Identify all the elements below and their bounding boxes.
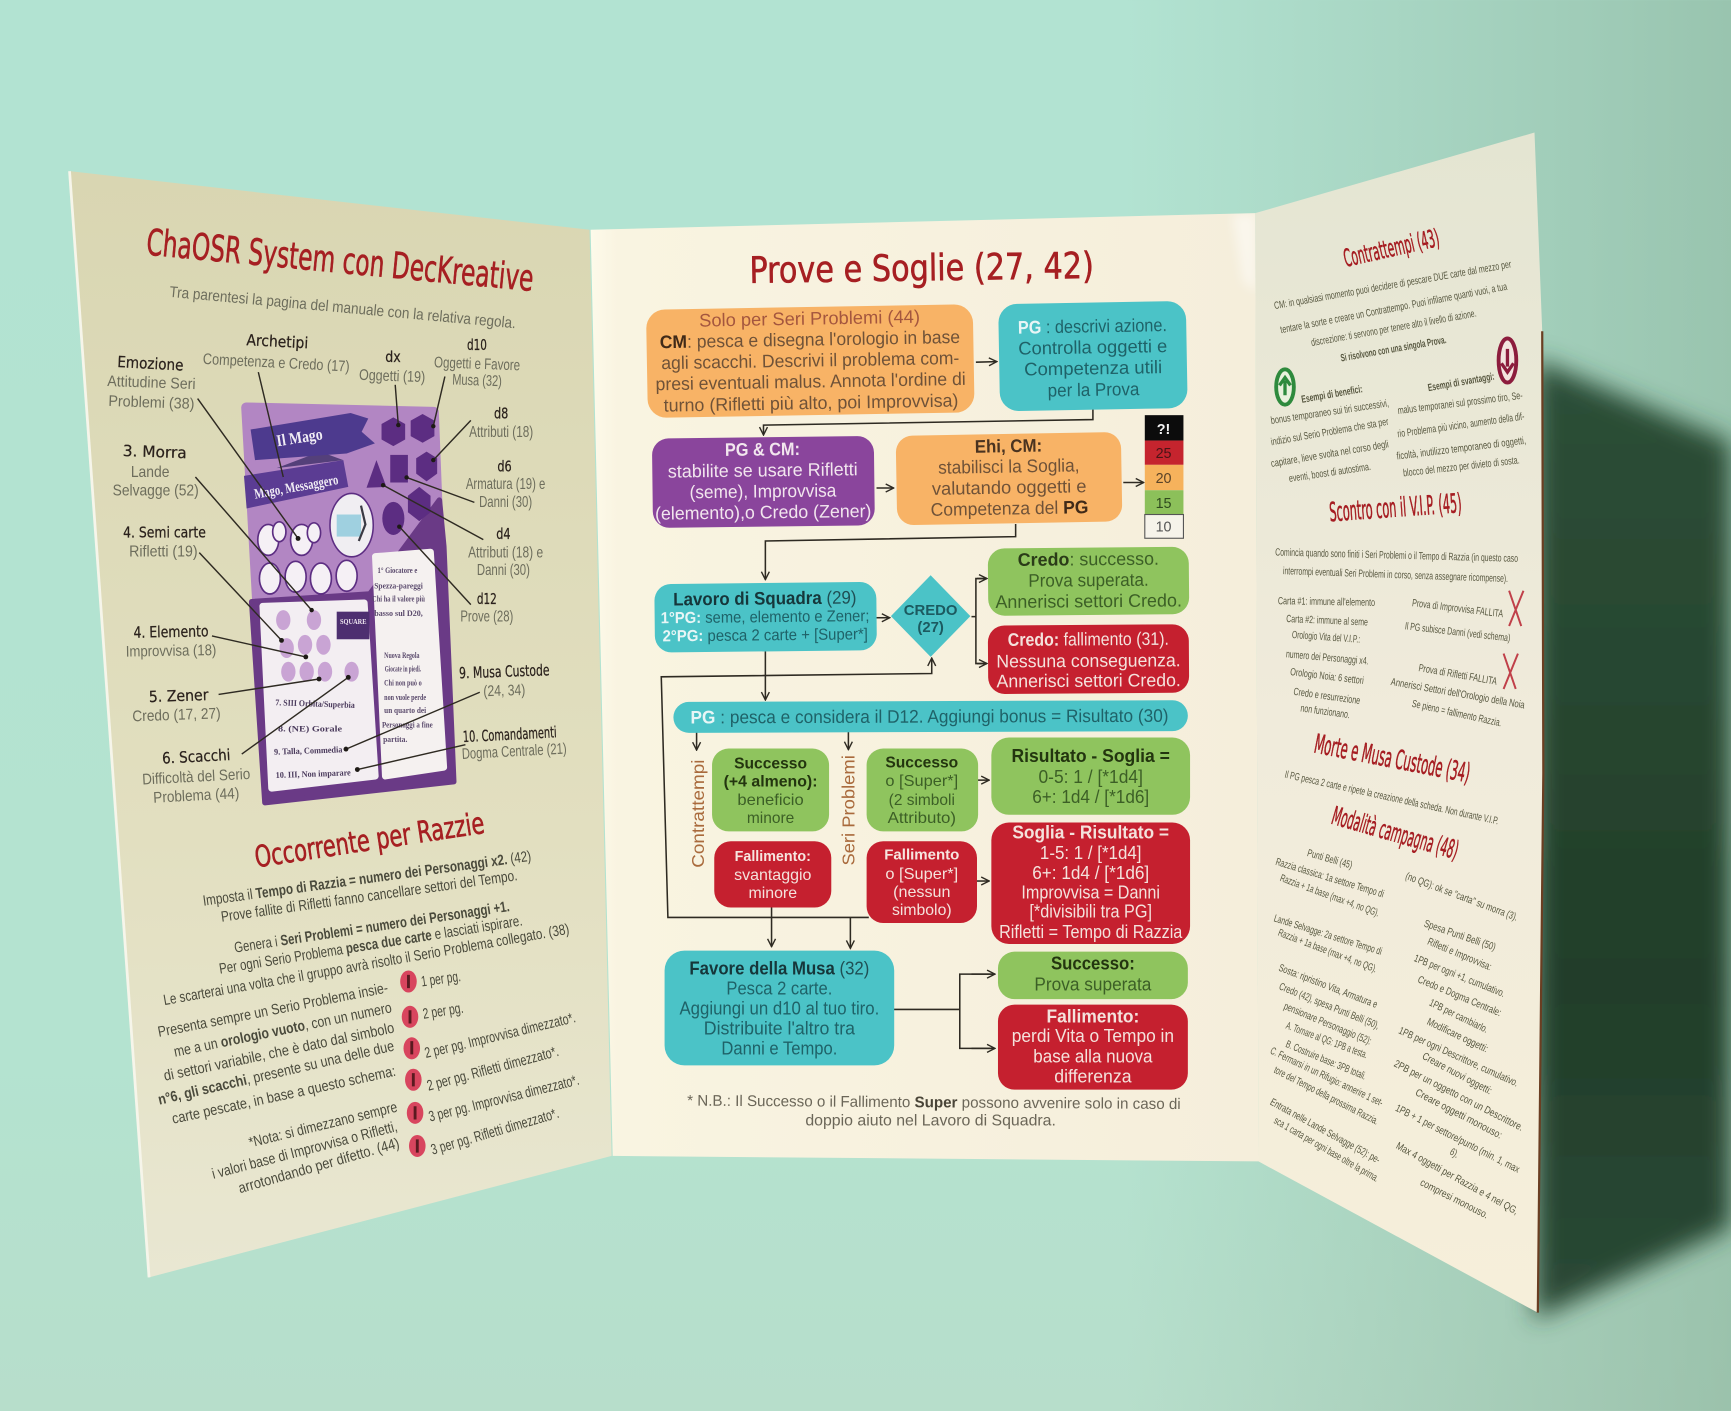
chart: threshold scale [1145, 415, 1183, 538]
box: Solo per Seri Problemi: CM: pesca e disegna l'orologio in base [660, 327, 960, 352]
callout: Archetipi [202, 331, 350, 376]
box: Favore della Musa [665, 951, 894, 1065]
text block: carte VIP: numero dei Personaggi x4. [1285, 649, 1369, 667]
text block: prove fallite: Prova di Improvvisa FALLITA [1411, 598, 1504, 620]
card right white area [375, 552, 444, 776]
callout: d6: Danni (30) [479, 494, 532, 511]
callout: 3. Morra [113, 442, 199, 500]
text block: orologio [157, 980, 397, 1128]
box: Favore della Musa: Aggiungi un d10 al tuo tiro. [679, 999, 879, 1019]
text block: campagna right column: Creare nuovi oggetti: [1420, 1051, 1493, 1097]
text block: nota: arrotondando per difetto. (44) [237, 1136, 401, 1197]
box: Successo +4 almeno: Successo [734, 755, 807, 772]
box: Risultato - Soglia: Risultato - Soglia = [1011, 746, 1170, 766]
box: Successo o Super: Successo [885, 754, 958, 771]
card left text: 7. SIII Orbita/Superbia [275, 697, 355, 710]
text block: contrattempi intro: CM: in qualsiasi momento puoi decidere di pescare DUE carte dal mezzo per [1273, 259, 1513, 312]
text block: campagna left column: Lande Selvagge: 2a settore Tempo di [1272, 913, 1383, 958]
box: Successo prova superata: Prova superata [1034, 974, 1152, 994]
square tag [337, 612, 369, 639]
card left text: 10. III, Non imparare [276, 767, 351, 780]
callout: Archetipi: Archetipi [246, 331, 309, 352]
panel: right page: Modalità campagna (48) [1329, 800, 1462, 865]
text block: scontro intro: Comincia quando sono finiti i Seri Problemi o il Tempo di Razzia (in questo caso [1275, 547, 1518, 565]
text block: svantaggi [1396, 372, 1527, 479]
box: Ehi, CM: Competenza del PG [930, 497, 1089, 520]
callout: 3. Morra: Lande [131, 464, 169, 481]
box: Lavoro di Squadra [654, 582, 877, 653]
text block: campagna left column: Entrata nelle Lande Selvagge (52): pe- [1268, 1097, 1382, 1166]
box: Risultato - Soglia: 6+: 1d4 / [*1d6] [1032, 787, 1149, 807]
callout: 10. Comandamenti: Dogma Centrale (21) [461, 741, 567, 763]
callout: 4. Elemento: 4. Elemento [133, 622, 209, 642]
subtitle: Tra parentesi la pagina del manuale con la relativa regola. [169, 284, 517, 332]
banner: Il Mago [251, 413, 375, 468]
text block: contrattempi intro [1273, 259, 1513, 364]
footnote: doppio aiuto nel Lavoro di Squadra. [805, 1113, 1056, 1130]
box: Credo successo: Prova superata. [1028, 570, 1149, 591]
square tag: SQUARE [340, 617, 367, 626]
chart: threshold scale: 20 [1156, 471, 1172, 487]
box: Lavoro di Squadra: Lavoro di Squadra (29) [673, 588, 857, 609]
text block: Tempo e Seri Problemi: Per ogni Serio Problema pesca due carte e lasciati ispirare. [218, 913, 524, 978]
text block: carte VIP: Credo e resurrezione [1293, 687, 1361, 707]
box: PG descrivi azione: PG : descrivi azione. [1018, 315, 1167, 338]
callout: Emozione: Problemi (38) [108, 393, 195, 413]
callout: Emozione [107, 353, 196, 413]
text block: campagna right column: compresi monouso. [1418, 1178, 1490, 1221]
callout: 5. Zener: 5. Zener [149, 686, 209, 706]
text block: contrattempi intro: Si risolvono con una singola Prova. [1340, 335, 1447, 364]
box: PG descrivi azione: Controlla oggetti e [1018, 336, 1167, 359]
text block: carte VIP: Carta #2: immune al seme [1286, 614, 1368, 629]
callout: 4. Semi carte: 4. Semi carte [123, 524, 206, 542]
text block: campagna left column: pensionare Personaggio (52): [1282, 1001, 1373, 1048]
text block: orologio: Presenta sempre un Serio Problema insie- [157, 980, 389, 1041]
text block: benefici: eventi, boost di autostima. [1288, 462, 1372, 485]
box: Fallimento perdi Vita: differenza [1054, 1067, 1132, 1087]
box: PG & CM: (seme), Improvvisa [689, 480, 837, 502]
box: Successo +4 almeno: minore [747, 810, 794, 827]
callout: d6: Armatura (19) e [466, 476, 545, 493]
icons: red clock badges [400, 970, 426, 1157]
text block: Tempo e Seri Problemi: Le scarterai una volta che il gruppo avrà risolto il Serio Problema collegato. (38) [162, 922, 571, 1009]
text block: svantaggi: blocco del mezzo per divieto di sosta. [1403, 455, 1520, 479]
box: Ehi, CM [896, 432, 1122, 525]
diagram: character card [244, 407, 454, 803]
callout: 10. Comandamenti [461, 723, 567, 763]
callout: 9. Musa Custode: 9. Musa Custode [459, 661, 550, 682]
callout: d10: d10 [467, 336, 487, 354]
text block: prove fallite: Il PG subisce Danni (vedi schema) [1404, 621, 1511, 644]
chart: threshold scale: 15 [1156, 496, 1172, 512]
panel: right page [1255, 133, 1543, 1313]
text block: campagna right column [1392, 871, 1525, 1221]
callout: 4. Semi carte: Rifletti (19) [129, 543, 198, 560]
card left text: 9. Talla, Commedia [274, 744, 343, 757]
box: Credo fallimento: Nessuna conseguenza. [996, 650, 1181, 672]
text block: scontro intro: interrompi eventuali Seri Problemi in corso, senza assegnare ricompense). [1283, 566, 1508, 585]
box: Favore della Musa: Favore della Musa (32) [689, 958, 869, 978]
text block: campagna left column: sca 1 carta per ogni base oltre la prima. [1272, 1116, 1380, 1185]
heading: Occorrente per Razzie: Occorrente per Razzie [252, 806, 487, 875]
callout: d12: Prove (28) [460, 609, 513, 626]
text block: prove fallite [1390, 598, 1526, 729]
text block: benefici: capitare, lieve svolta nel corso degli [1270, 439, 1390, 470]
text block: svantaggi: malus temporanei sul prossimo tiro, Se- [1397, 391, 1524, 417]
text block: svantaggi: rio Problema più vicino, aumento della dif- [1397, 412, 1525, 440]
heading: ChaOSR System: ChaOSR System con DecKreative [145, 221, 536, 300]
list: clock schema: 3 per pg. Rifletti dimezzato*. [429, 1106, 561, 1159]
box: Solo per Seri Problemi [646, 304, 975, 418]
box: Successo o Super [867, 749, 978, 831]
heading: Prove e Soglie: Prove e Soglie (27, 42) [749, 244, 1094, 292]
box: Favore della Musa: Pesca 2 carte. [726, 979, 832, 999]
box: PG & CM: stabilite se usare Rifletti [668, 459, 858, 482]
connectors and arrows [661, 362, 1144, 1048]
portrait [330, 493, 373, 557]
box: Fallimento perdi Vita: base alla nuova [1033, 1047, 1153, 1067]
box: Credo successo [988, 547, 1189, 616]
text block: campagna right column: (no QG): ok se "carta" su morra (3). [1404, 871, 1519, 924]
text block: campagna left column: Credo (42), spesa Punti Belli (50), [1277, 982, 1381, 1032]
chart: threshold scale: ?! [1157, 422, 1170, 438]
panel: middle page [591, 213, 1259, 1161]
box: Credo successo: Credo: successo. [1018, 549, 1159, 570]
box: Successo +4 almeno [712, 749, 829, 831]
box: Successo prova superata: Successo: [1051, 953, 1135, 973]
box: Successo +4 almeno: (+4 almeno): [724, 774, 817, 791]
box: Successo o Super: Attributo) [888, 810, 956, 827]
text block: campagna left column: C. Fermarsi in un Rifugio: annerire 1 set- [1268, 1046, 1385, 1109]
callout: 3. Morra: 3. Morra [122, 442, 187, 462]
box: Solo per Seri Problemi: agli scacchi. Descrivi il problema com- [661, 348, 959, 373]
diamond: Credo: CREDO [904, 603, 958, 619]
text block: Tempo e Seri Problemi: Prove fallite di Rifletti fanno cancellare settori del Tempo. [220, 868, 519, 926]
leader lines [195, 372, 483, 772]
box: Favore della Musa: Danni e Tempo. [721, 1038, 837, 1058]
callout: d8 [469, 404, 533, 441]
box: Successo prova superata [998, 952, 1188, 999]
box: Fallimento o Super: Fallimento [884, 848, 959, 864]
text block: campagna left column: Punti Belli (45) [1306, 848, 1353, 872]
text block: campagna right column: 2PB per un oggetto con un Descrittore. [1392, 1059, 1525, 1134]
list: clock schema [420, 969, 581, 1159]
box: Ehi, CM: stabilisci la Soglia, [938, 455, 1080, 478]
callout: Emozione: Emozione [117, 353, 184, 375]
callout: dx: dx [385, 348, 401, 366]
diamond: Credo [891, 575, 970, 657]
card right text: 1° Giocatore e [378, 565, 417, 575]
label: Contrattempi: Contrattempi [689, 760, 708, 868]
card right text: Nuova Regola [384, 650, 420, 660]
text block: campagna right column: Max 4 oggetti per Razzia e 4 nel QG, [1394, 1141, 1520, 1217]
banner: Mago, Messaggero [244, 460, 348, 508]
text block: campagna right column: 1PB per ogni +1, cumulativo. [1412, 953, 1506, 1000]
text block: campagna left column: Sosta: ripristino Vita, Armatura e [1277, 963, 1379, 1011]
box: Successo +4 almeno: beneficio [737, 792, 804, 809]
box: PG descrivi azione [998, 301, 1188, 411]
text block: Tempo e Seri Problemi: Imposta il Tempo di Razzia = numero dei Personaggi x2. (42) [202, 849, 532, 910]
list: clock schema: 2 per pg. Rifletti dimezzato*. [425, 1044, 561, 1095]
callout: d8: d8 [494, 404, 508, 422]
text block: campagna right column: 1PB per ogni Descrittore, cumulativo. [1397, 1026, 1520, 1090]
text block: prove fallite: Se pieno = fallimento Razzia. [1411, 699, 1503, 729]
box: Solo per Seri Problemi: Solo per Seri Problemi (44) [699, 307, 920, 331]
text block: nota: *Nota: si dimezzano sempre [247, 1100, 399, 1151]
text block: campagna left column: A. Tornare al QG: 1PB a testa. [1284, 1021, 1369, 1061]
callout: 3. Morra: Selvagge (52) [113, 483, 199, 500]
box: Credo fallimento: Annerisci settori Credo. [996, 670, 1181, 691]
text block: svantaggi: Esempi di svantaggi: [1427, 372, 1495, 394]
bar: PG pesca: PG : pesca e considera il D12. Aggiungi bonus = Risultato (30) [690, 706, 1169, 727]
list: clock schema: 3 per pg. Improvvisa dimezzato*. [427, 1073, 581, 1125]
callout: d12: d12 [477, 590, 497, 608]
box: Credo successo: Annerisci settori Credo. [995, 590, 1182, 612]
box: Risultato - Soglia: 0-5: 1 / [*1d4] [1038, 767, 1143, 787]
icon: green up arrow [1276, 369, 1294, 405]
text block: campagna left column: Razzia + 1a base (max +4, no QG). [1278, 873, 1381, 919]
box: Soglia - Risultato [991, 823, 1190, 944]
icon: red down arrow [1499, 338, 1516, 383]
list: clock schema: 2 per pg. Improvvisa dimezzato*. [423, 1010, 577, 1062]
text block: campagna right column: Creare oggetti monouso: [1413, 1088, 1504, 1141]
text block: nota: i valori base di Improvvisa o Rifletti, [210, 1119, 399, 1183]
text block: campagna left column [1268, 848, 1385, 1185]
text block: benefici: indizio sul Serio Problema che sta per [1270, 417, 1390, 448]
card right text: Chi ha il valore più [372, 594, 425, 604]
card left text: 8. (NE) Gorale [278, 723, 342, 733]
box: PG descrivi azione: per la Prova [1048, 379, 1140, 401]
list: clock schema: 2 per pg. [422, 1001, 465, 1023]
card right text: Chi non può o [384, 678, 422, 688]
callout: 5. Zener: Credo (17, 27) [132, 705, 221, 725]
callout: 4. Semi carte [123, 524, 206, 560]
heading: Contrattempi: Contrattempi (43) [1341, 223, 1442, 273]
text block: Tempo e Seri Problemi: Genera i Seri Problemi = numero dei Personaggi +1. [233, 899, 511, 957]
callout: d4 [468, 525, 543, 579]
panel: right page: Scontro con il V.I.P. (45) [1328, 488, 1463, 528]
text: morte: Il PG pesca 2 carte e ripete la creazione della scheda. Non durante V.I.P. [1284, 770, 1499, 827]
box: Fallimento svantaggio: svantaggio [734, 867, 812, 884]
dice icons [367, 414, 437, 535]
text block: campagna right column: Rifletti e Improvvisa: [1426, 937, 1493, 973]
callout: d10: Musa (32) [452, 371, 502, 390]
card right text [372, 565, 433, 744]
card right text: non vuole perde [384, 692, 426, 702]
callout: dx: Oggetti (19) [359, 367, 425, 386]
callout: 6. Scacchi [142, 746, 251, 807]
card right text: Giocate in piedi. [385, 663, 421, 673]
panel: right page: Morte e Musa Custode (34) [1312, 729, 1473, 789]
box: Solo per Seri Problemi: presi eventuali malus. Annota l'ordine di [655, 369, 966, 394]
box: Lavoro di Squadra: 1°PG: seme, elemento e Zener; [661, 608, 869, 627]
callout: d4: Danni (30) [477, 562, 530, 579]
text block: campagna left column: tore del Tempo della prossima Razzia. [1272, 1065, 1380, 1127]
cast shadow on the wall right of the booklet [1534, 359, 1731, 1319]
callout: d6 [466, 457, 545, 511]
text block: campagna right column: 1PB + 1 per settore/punto (min. 1, max [1393, 1103, 1522, 1176]
card right text: Personaggi a fine [382, 720, 433, 730]
text block: carte VIP [1278, 596, 1375, 721]
callout: Archetipi: Competenza e Credo (17) [202, 351, 350, 376]
box: Soglia - Risultato: 1-5: 1 / [*1d4] [1040, 843, 1141, 863]
diamond: Credo: (27) [917, 620, 944, 636]
box: PG & CM: PG & CM: [725, 439, 800, 460]
box: PG & CM: (elemento),o Credo (Zener) [655, 501, 872, 524]
box: Soglia - Risultato: Improvvisa = Danni [1021, 883, 1160, 903]
card right text: Spezza-pareggi [374, 580, 423, 590]
callout: d4: d4 [496, 525, 511, 543]
text block: prove fallite: Prova di Rifletti FALLITA [1418, 663, 1498, 688]
box: PG descrivi azione: Competenza utili [1024, 357, 1162, 380]
callout: 5. Zener [132, 686, 221, 725]
icon: red X marks [1504, 591, 1523, 689]
list: clock schema: 1 per pg. [420, 969, 462, 990]
box: Ehi, CM: Ehi, CM: [975, 436, 1042, 457]
panel: left page [70, 171, 612, 1277]
text block: campagna left column: Razzia + 1a base (max +4, no QG). [1276, 928, 1378, 975]
box: Favore della Musa: Distribuite l'altro tra [704, 1018, 856, 1038]
card lower frame [252, 500, 454, 803]
text block: benefici: bonus temporaneo sui tiri successivi, [1270, 398, 1390, 427]
text block: campagna right column: 6). [1447, 1147, 1461, 1161]
box: Fallimento o Super: simbolo) [892, 902, 952, 919]
callout: 6. Scacchi: Difficoltà del Serio [142, 766, 251, 788]
callout: 4. Elemento: Improvvisa (18) [126, 642, 216, 661]
chart: threshold scale: 25 [1156, 446, 1172, 462]
callout: d10 [434, 336, 520, 390]
callout: d10: Oggetti e Favore [434, 354, 520, 374]
banner: Il Mago: Il Mago [275, 424, 324, 450]
callout: 9. Musa Custode: (24, 34) [483, 682, 526, 700]
banner: Mago, Messaggero: Mago, Messaggero [253, 472, 340, 503]
box: Soglia - Risultato: Rifletti = Tempo di Razzia [999, 922, 1183, 942]
text block: benefici: Esempi di benefici: [1301, 384, 1363, 406]
card left text [274, 697, 355, 780]
text block: Tempo e Seri Problemi [162, 849, 571, 1009]
card right text: un quarto dei [384, 705, 427, 715]
box: Soglia - Risultato: 6+: 1d4 / [*1d6] [1032, 863, 1149, 883]
label: Seri Problemi: Seri Problemi [839, 755, 858, 866]
callout: 6. Scacchi: 6. Scacchi [162, 746, 231, 768]
card right text: basso sul D20, [374, 608, 423, 618]
box: Fallimento perdi Vita: perdi Vita o Tempo in [1012, 1026, 1174, 1046]
box: Soglia - Risultato: Soglia - Risultato = [1012, 823, 1169, 843]
box: Fallimento svantaggio: minore [748, 885, 797, 902]
box: Fallimento svantaggio: Fallimento: [735, 849, 811, 865]
card suit icons [276, 610, 359, 682]
box: PG & CM [652, 436, 875, 528]
text block: campagna right column: 1PB per cambiarlo. [1427, 998, 1490, 1036]
box: Fallimento perdi Vita [998, 1005, 1188, 1090]
box: Fallimento svantaggio [714, 841, 831, 908]
text block: campagna right column: Credo e Dogma Centrale: [1416, 975, 1503, 1019]
text block: contrattempi intro: discrezione: ti servono per tenere alto il livello di azione. [1310, 309, 1477, 349]
text block: carte VIP: Carta #1: immune all'elemento [1278, 596, 1375, 609]
box: Credo fallimento [988, 624, 1189, 694]
chart: threshold scale: 10 [1156, 520, 1172, 536]
callout: d8: Attributi (18) [469, 424, 533, 441]
box: Lavoro di Squadra: 2°PG: pesca 2 carte + [Super*] [662, 626, 868, 645]
callout: d6: d6 [497, 457, 512, 475]
text block: svantaggi: ficoltà, inutilizzo temporaneo di oggetti, [1396, 436, 1527, 463]
text block: scontro intro [1275, 547, 1518, 585]
callout: d12 [460, 590, 513, 626]
box: Fallimento o Super: o [Super*] [885, 866, 958, 883]
box: Fallimento o Super [867, 841, 977, 923]
card right text: partita. [383, 734, 407, 744]
text block: carte VIP: Orologio Vita del V.I.P.: [1292, 630, 1361, 646]
bar: PG pesca [673, 700, 1188, 733]
callout: 6. Scacchi: Problema (44) [153, 785, 240, 807]
text block: prove fallite: Annerisci Settori dell'Orologio della Noia [1390, 677, 1526, 711]
callout: 4. Elemento [126, 622, 216, 661]
footnote [687, 1093, 1181, 1130]
text block: campagna right column: Spesa Punti Belli (50) [1422, 919, 1497, 953]
callout: 9. Musa Custode [459, 661, 550, 700]
text block: orologio: di settori variabile, che è dato dal simbolo [162, 1021, 396, 1085]
box: Fallimento o Super: (nessun [893, 884, 951, 901]
box: Soglia - Risultato: [*divisibili tra PG] [1029, 901, 1152, 921]
box: Solo per Seri Problemi: turno (Rifletti più alto, poi Improvvisa) [664, 391, 959, 416]
callout: 10. Comandamenti: 10. Comandamenti [462, 723, 557, 746]
text block: campagna left column: B. Costruire base: 3PB totali. [1284, 1039, 1368, 1082]
callout: Emozione: Attitudine Seri [107, 373, 196, 393]
text block: campagna right column: Modificare oggetti: [1425, 1017, 1489, 1055]
text block: orologio: n°6, gli scacchi, presente su una delle due [157, 1039, 396, 1109]
text block: benefici [1270, 384, 1390, 485]
archetype icons [258, 522, 357, 594]
box: Successo o Super: o [Super*] [885, 773, 958, 790]
footnote: * N.B.: Il Successo o il Fallimento Super possono avvenire solo in caso di [687, 1093, 1181, 1113]
box: Successo o Super: (2 simboli [889, 792, 955, 809]
box: Fallimento perdi Vita: Fallimento: [1047, 1006, 1139, 1026]
text block: nota [210, 1100, 401, 1197]
text block: campagna left column: Razzia classica: 1a settore Tempo di [1274, 857, 1385, 900]
box: Risultato - Soglia [991, 738, 1190, 815]
callout: dx [359, 348, 425, 386]
box: Ehi, CM: valutando oggetti e [932, 476, 1087, 499]
box: Credo fallimento: Credo: fallimento (31). [1008, 629, 1169, 650]
text block: carte VIP: non funzionano. [1300, 703, 1350, 721]
text block: orologio: me a un orologio vuoto, con un numero [173, 1000, 393, 1061]
text block: carte VIP: Orologio Noia: 6 settori [1290, 667, 1364, 687]
text block: orologio: carte pescate, in base a questo schema: [171, 1064, 397, 1128]
card left white area [263, 603, 375, 788]
callout: d4: Attributi (18) e [468, 545, 543, 562]
text block: contrattempi intro: tentare la sorte e creare un Contrattempo. Puoi infilarne quanti vuoi, a tua [1279, 282, 1508, 336]
